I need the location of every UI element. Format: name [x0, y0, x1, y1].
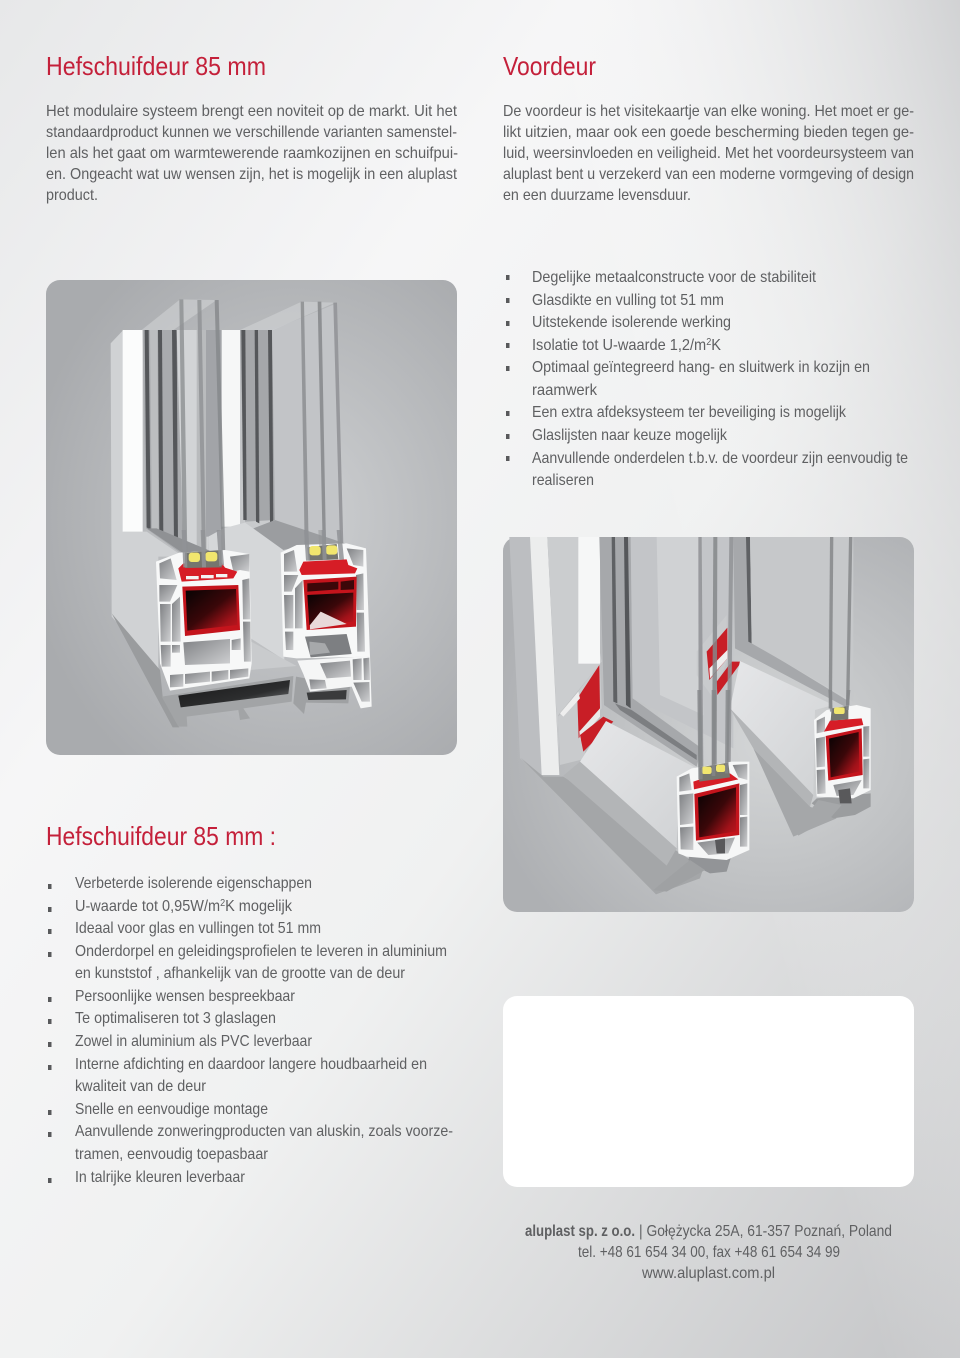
list: hefschuifdeur features: U-waarde tot 0,95W/m: [75, 898, 235, 915]
heading: Hefschuifdeur 85 mm: Hefschuifdeur 85 mm: [46, 51, 266, 81]
list: voordeur features: Glaslijsten naar keuze mogelijk: [532, 427, 728, 444]
list: voordeur features: Aanvullende onderdelen t.b.v. de voordeur zijn eenvoudig te: [532, 450, 908, 467]
text block: intro right: aluplast bent u verzekerd van een moderne vormgeving of design: [503, 166, 914, 183]
left profile: [156, 530, 297, 691]
glass panes: [142, 299, 343, 555]
cut red section left: [558, 663, 613, 765]
text block: intro left: len als het gaat om warmtewerende raamkozijnen en schuifpui-: [46, 145, 458, 162]
list: voordeur features: Glasdikte en vulling tot 51 mm: [532, 292, 724, 309]
list: voordeur features: 2: [706, 337, 712, 348]
list: hefschuifdeur features: Aanvullende zonweringproducten van aluskin, zoals voorze-: [75, 1123, 453, 1140]
rear profile: [795, 690, 871, 836]
footer: contact details: | Gołężycka 25A, 61-357 Poznań, Poland: [639, 1223, 892, 1240]
list: voordeur features: Degelijke metaalconstructe voor de stabiliteit: [532, 269, 816, 286]
list: hefschuifdeur features: Persoonlijke wensen bespreekbaar: [75, 988, 296, 1005]
list: hefschuifdeur features: en kunststof , afhankelijk van de grootte van de deur: [75, 965, 406, 982]
right profile: [281, 530, 372, 708]
footer: contact details: tel. +48 61 654 34 00, fax +48 61 654 34 99: [578, 1244, 840, 1261]
list: hefschuifdeur features: Zowel in aluminium als PVC leverbaar: [75, 1033, 313, 1050]
footer: contact details: aluplast sp. z o.o.: [525, 1223, 635, 1240]
text block: intro left: [46, 103, 458, 204]
list: hefschuifdeur features: 2: [220, 898, 226, 909]
footer: contact details: [525, 1223, 892, 1282]
footer: contact details: www.aluplast.com.pl: [641, 1265, 775, 1282]
text block: intro right: likt uitzien, maar ook een goede bescherming bieden tegen ge-: [503, 124, 914, 141]
list: hefschuifdeur features: Verbeterde isolerende eigenschappen: [75, 875, 312, 892]
panel: sliding door profile image: [46, 280, 457, 755]
list: hefschuifdeur features: Ideaal voor glas en vullingen tot 51 mm: [75, 920, 321, 937]
list: voordeur features: K: [711, 337, 721, 354]
list: hefschuifdeur features: kwaliteit van de deur: [75, 1078, 207, 1095]
heading: Hefschuifdeur 85 mm :: Hefschuifdeur 85 mm :: [46, 821, 276, 851]
list: voordeur features: Isolatie tot U-waarde 1,2/m: [532, 337, 723, 354]
list: hefschuifdeur features: Snelle en eenvoudige montage: [75, 1101, 268, 1118]
list: voordeur features: raamwerk: [532, 382, 598, 399]
list: voordeur features: [506, 269, 908, 489]
list: hefschuifdeur features: [48, 875, 453, 1186]
list: voordeur features: Optimaal geïntegreerd hang- en sluitwerk in kozijn en: [532, 359, 870, 376]
text block: intro right: en een duurzame levensduur.: [503, 187, 691, 204]
heading: Voordeur: Voordeur: [503, 51, 596, 81]
text block: intro left: product.: [46, 187, 98, 204]
list: hefschuifdeur features: K mogelijk: [225, 898, 293, 915]
panel: front door profile image: [503, 537, 914, 912]
list: voordeur features: Uitstekende isolerende werking: [532, 314, 731, 331]
aluminium channels: [162, 676, 350, 727]
bullets: [48, 884, 52, 1183]
text block: intro left: Het modulaire systeem brengt een noviteit op de markt. Uit het: [46, 103, 458, 120]
text block: intro right: De voordeur is het visitekaartje van elke woning. Het moet er ge-: [503, 103, 914, 120]
list: hefschuifdeur features: Onderdorpel en geleidingsprofielen te leveren in aluminium: [75, 943, 447, 960]
list: hefschuifdeur features: Interne afdichting en daardoor langere houdbaarheid en: [75, 1056, 427, 1073]
text block: intro right: luid, weersinvloeden en veiligheid. Met het voordeursysteem van: [503, 145, 914, 162]
cross-sections: [156, 530, 372, 727]
bullets: [506, 275, 510, 461]
text block: intro right: [503, 103, 914, 204]
list: voordeur features: Een extra afdeksysteem ter beveiliging is mogelijk: [532, 404, 847, 421]
front profile: [653, 690, 749, 892]
text block: intro left: en. Ongeacht wat uw wensen zijn, het is mogelijk in een aluplast: [46, 166, 457, 183]
panel: white blank box: [503, 996, 914, 1187]
text block: intro left: standaardproduct kunnen we verschillende varianten samenstel-: [46, 124, 457, 141]
list: hefschuifdeur features: tramen, eenvoudig toepasbaar: [75, 1146, 269, 1163]
list: hefschuifdeur features: Te optimaliseren tot 3 glaslagen: [75, 1010, 276, 1027]
list: hefschuifdeur features: In talrijke kleuren leverbaar: [75, 1169, 246, 1186]
list: voordeur features: realiseren: [532, 472, 594, 489]
cut red section right: [697, 615, 742, 698]
profile sections: [653, 690, 871, 892]
